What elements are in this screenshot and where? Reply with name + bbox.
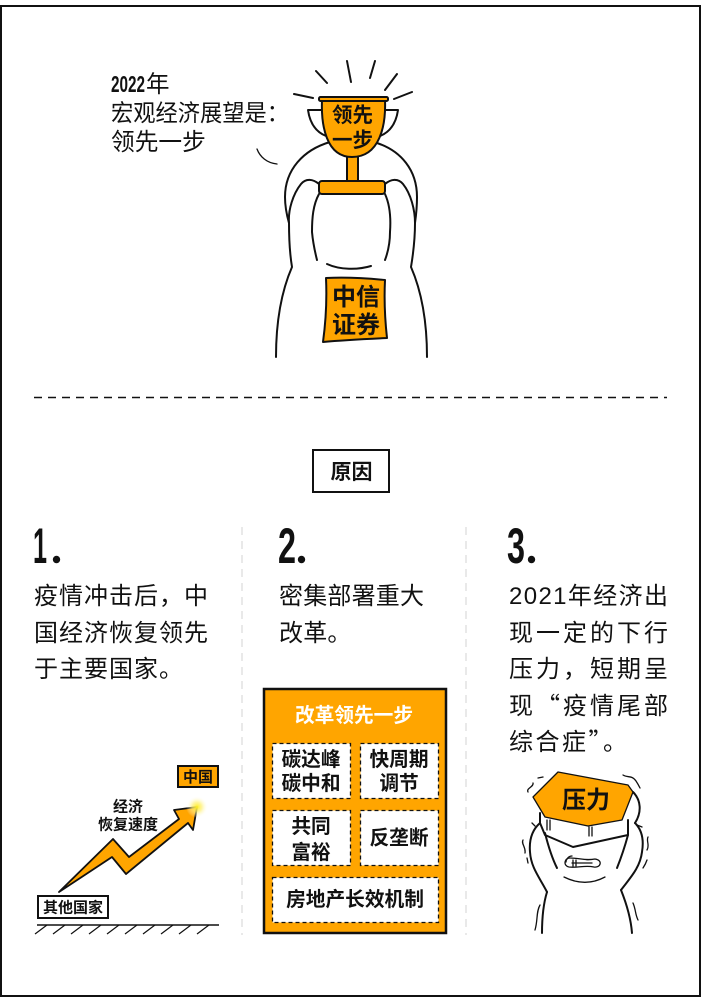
section heading: 原因 (313, 450, 389, 492)
column 1 text: 1 (33, 518, 47, 574)
item: antitrust: 反垄断 (369, 828, 429, 850)
column 3 text: 现“疫情尾部 (509, 686, 668, 721)
label: 中国: 中国 (183, 769, 213, 786)
item: cycle adjustment: 快周期 (369, 749, 429, 771)
speech mark (257, 149, 277, 164)
item: carbon: 碳达峰 (281, 749, 341, 771)
item: cycle adjustment: 调节 (379, 773, 419, 795)
ground line (35, 925, 219, 934)
column 3 text: 现一定的下行 (509, 620, 668, 647)
orange rock: 压力: 压力 (562, 787, 610, 814)
column 2 text (278, 518, 424, 647)
item: carbon (272, 744, 350, 798)
orange rock: 压力 (533, 772, 633, 826)
illustration: character holding trophy (276, 61, 427, 357)
label: economic recovery speed (98, 798, 158, 834)
column 2 text: 密集部署重大 (279, 583, 424, 610)
character body (276, 142, 427, 357)
label: other countries: 其他国家 (43, 898, 103, 916)
item: cycle adjustment (360, 744, 438, 798)
trophy (308, 97, 398, 194)
column 1 text (33, 518, 209, 683)
orange sign: 中信证券 (323, 278, 387, 342)
column 2 text: 2 (278, 518, 296, 574)
column 3 text: 3 (507, 518, 525, 574)
section heading: 原因: 原因 (330, 461, 372, 484)
item: real estate: 房地产长效机制 (286, 889, 424, 911)
column 1 text: 于主要国家。 (34, 656, 184, 683)
item: carbon: 碳中和 (281, 773, 341, 795)
chart: recovery speed arrow (35, 766, 219, 934)
column dividers (242, 527, 466, 935)
dashed divider (34, 396, 667, 398)
column 3 text: 综合症”。 (509, 722, 630, 757)
headline text: 2022 (111, 71, 145, 97)
label: economic recovery speed: 恢复速度 (98, 816, 158, 834)
headline text: 宏观经济展望是： (111, 100, 289, 126)
column 3 text: 压力，短期呈 (509, 656, 668, 683)
panel: reform leads one step (264, 689, 446, 933)
shaking marks (523, 775, 648, 930)
label: economic recovery speed: 经济 (113, 798, 143, 816)
orange sign: 中信证券: 中信 (332, 284, 380, 311)
label: 中国 (178, 766, 218, 787)
headline text: 年 (146, 71, 170, 97)
character body (530, 823, 643, 933)
orange sign: 中信证券: 证券 (332, 312, 380, 339)
headline text: 领先一步 (111, 129, 206, 156)
column 2 text: 改革。 (279, 620, 352, 647)
face: mouth (565, 856, 600, 867)
trophy: 一步 (332, 129, 373, 152)
item: antitrust (360, 810, 438, 866)
headline text (111, 71, 289, 156)
item: real estate (272, 878, 438, 922)
column 3 text: 2021年经济出 (509, 583, 668, 610)
panel title: 改革领先一步 (295, 704, 413, 727)
rock underside (540, 792, 640, 847)
column 1 text: 国经济恢复领先 (34, 620, 209, 647)
trophy: 领先 (332, 104, 373, 127)
item: common prosperity: 富裕 (291, 841, 331, 864)
item: common prosperity (272, 810, 350, 866)
column 1 text: 疫情冲击后，中 (34, 583, 209, 610)
trophy shine rays (294, 61, 412, 99)
label: other countries (38, 896, 108, 918)
rising arrow (59, 796, 208, 892)
column 3 text (507, 518, 668, 757)
item: common prosperity: 共同 (291, 816, 331, 838)
illustration: character under pressure (523, 772, 648, 933)
